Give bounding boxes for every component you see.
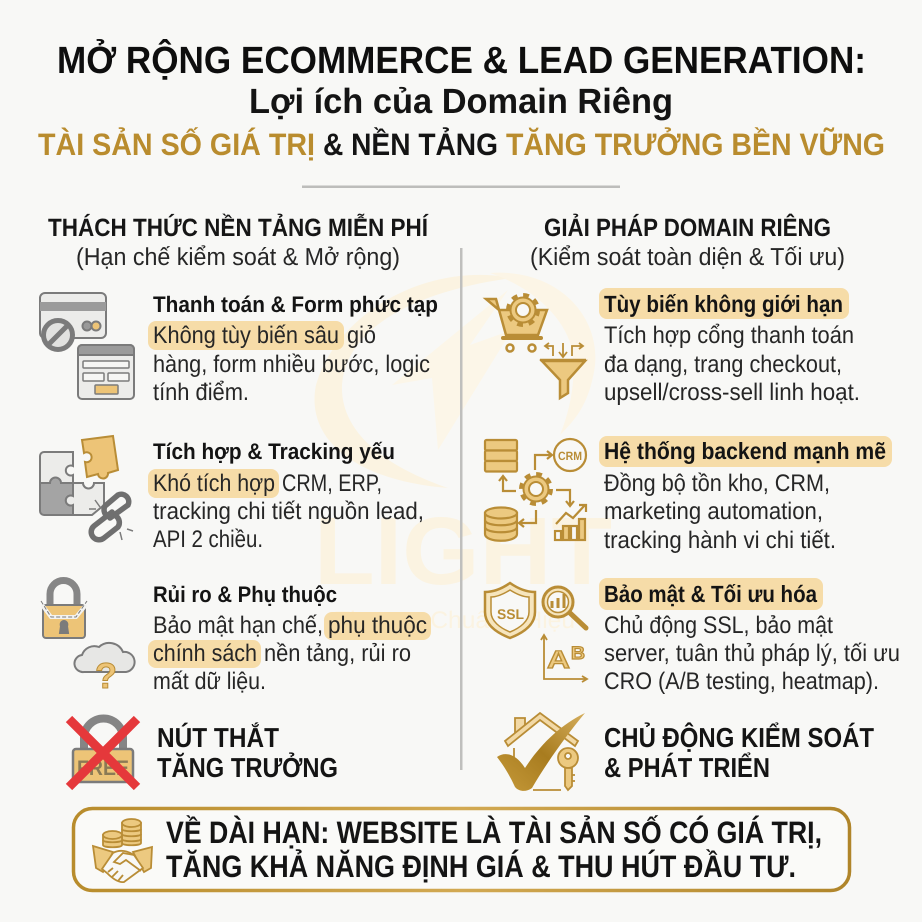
- icon: cart and funnel: [486, 296, 586, 398]
- item: strong backend: [599, 436, 892, 554]
- title: Lợi ích của Domain Riêng: [249, 82, 673, 121]
- icon: backend systems: [485, 439, 586, 541]
- left column heading: THÁCH THỨC NỀN TẢNG MIỄN PHÍ: [48, 213, 429, 242]
- item: payment and forms: tính điểm.: [153, 379, 249, 406]
- title: [38, 38, 885, 162]
- item: payment and forms: [148, 292, 438, 406]
- item: unlimited customization: Tùy biến không giới hạn: [604, 291, 843, 317]
- title: TĂNG TRƯỞNG BỀN VỮNG: [506, 127, 885, 162]
- right column heading: [530, 213, 845, 271]
- item: risk and dependency: Bảo mật hạn chế,: [153, 612, 323, 639]
- icon: crossed-out FREE lock: [69, 718, 137, 787]
- item: payment and forms: giỏ: [347, 322, 376, 349]
- item: risk and dependency: nền tảng, rủi ro: [264, 640, 411, 667]
- icon: puzzle and broken chain: [40, 436, 133, 540]
- item: security and optimization: Chủ động SSL, bảo mật: [604, 612, 833, 639]
- item: integration and tracking: [148, 439, 424, 553]
- icon: SSL shield, magnifier, A/B chart: SSL: [497, 606, 524, 622]
- item: security and optimization: Bảo mật & Tối ưu hóa: [604, 581, 818, 607]
- bottleneck label: NÚT THẮT: [157, 722, 279, 753]
- item: strong backend: marketing automation,: [604, 498, 823, 525]
- item: security and optimization: server, tuân thủ pháp lý, tối ưu: [604, 640, 900, 667]
- bottleneck label: [157, 722, 338, 783]
- item: integration and tracking: tracking chi tiết nguồn lead,: [153, 498, 424, 525]
- item: security and optimization: CRO (A/B testing, heatmap).: [604, 668, 879, 695]
- control and growth label: CHỦ ĐỘNG KIỂM SOÁT: [604, 722, 874, 753]
- icon: chained lock and cloud question: ?: [95, 655, 117, 696]
- control and growth label: [604, 722, 874, 783]
- item: unlimited customization: Tích hợp cổng thanh toán: [604, 322, 854, 349]
- callout: long term: [74, 808, 850, 890]
- left column heading: (Hạn chế kiểm soát & Mở rộng): [76, 244, 400, 271]
- item: unlimited customization: đa dạng, trang checkout,: [604, 351, 842, 378]
- icon: crossed-out FREE lock: FREE: [77, 757, 129, 780]
- item: integration and tracking: Tích hợp & Tracking yếu: [153, 439, 395, 464]
- watermark logo: Thương Chuẩn - Hiệu: [335, 607, 575, 634]
- item: integration and tracking: CRM, ERP,: [282, 470, 382, 497]
- icon: SSL shield, magnifier, A/B chart: [485, 583, 587, 682]
- icon: house, key and check mark: [497, 713, 585, 791]
- item: payment and forms: Thanh toán & Form phức tạp: [153, 292, 438, 317]
- icon: chained lock and cloud question: [41, 580, 135, 696]
- left column heading: [48, 213, 429, 271]
- item: risk and dependency: mất dữ liệu.: [153, 668, 266, 695]
- right column heading: GIẢI PHÁP DOMAIN RIÊNG: [544, 213, 831, 242]
- callout: long term: TĂNG KHẢ NĂNG ĐỊNH GIÁ & THU HÚT ĐẦU TƯ.: [166, 849, 796, 884]
- title: MỞ RỘNG ECOMMERCE & LEAD GENERATION:: [57, 38, 866, 82]
- bottleneck label: TĂNG TRƯỞNG: [157, 752, 338, 783]
- title: TÀI SẢN SỐ GIÁ TRỊ: [38, 127, 315, 162]
- item: unlimited customization: upsell/cross-sell linh hoạt.: [604, 379, 860, 406]
- icon: SSL shield, magnifier, A/B chart: A: [547, 646, 570, 674]
- watermark logo: [314, 273, 612, 634]
- right column heading: (Kiểm soát toàn diện & Tối ưu): [530, 244, 845, 271]
- icon: backend systems: CRM: [558, 449, 582, 463]
- item: risk and dependency: Rủi ro & Phụ thuộc: [153, 582, 337, 607]
- icon: SSL shield, magnifier, A/B chart: B: [571, 643, 585, 663]
- item: risk and dependency: chính sách: [153, 640, 257, 667]
- item: strong backend: Đồng bộ tồn kho, CRM,: [604, 470, 830, 497]
- item: payment and forms: hàng, form nhiều bước, logic: [153, 351, 430, 378]
- callout: long term: VỀ DÀI HẠN: WEBSITE LÀ TÀI SẢN SỐ CÓ GIÁ TRỊ,: [166, 815, 822, 850]
- watermark logo: LIGHT: [314, 498, 612, 605]
- icon: coins and handshake: [93, 819, 152, 882]
- item: unlimited customization: [599, 288, 860, 406]
- item: risk and dependency: phụ thuộc: [328, 612, 427, 639]
- item: strong backend: tracking hành vi chi tiết.: [604, 527, 836, 554]
- item: integration and tracking: Khó tích hợp: [153, 470, 275, 497]
- item: payment and forms: Không tùy biến sâu: [153, 322, 339, 349]
- item: integration and tracking: API 2 chiều.: [153, 526, 263, 553]
- item: risk and dependency: [148, 582, 431, 695]
- item: strong backend: Hệ thống backend mạnh mẽ: [604, 438, 886, 464]
- control and growth label: & PHÁT TRIỂN: [604, 752, 770, 783]
- icon: blocked card and form: [40, 293, 134, 399]
- title: & NỀN TẢNG: [323, 127, 498, 162]
- item: security and optimization: [599, 578, 900, 695]
